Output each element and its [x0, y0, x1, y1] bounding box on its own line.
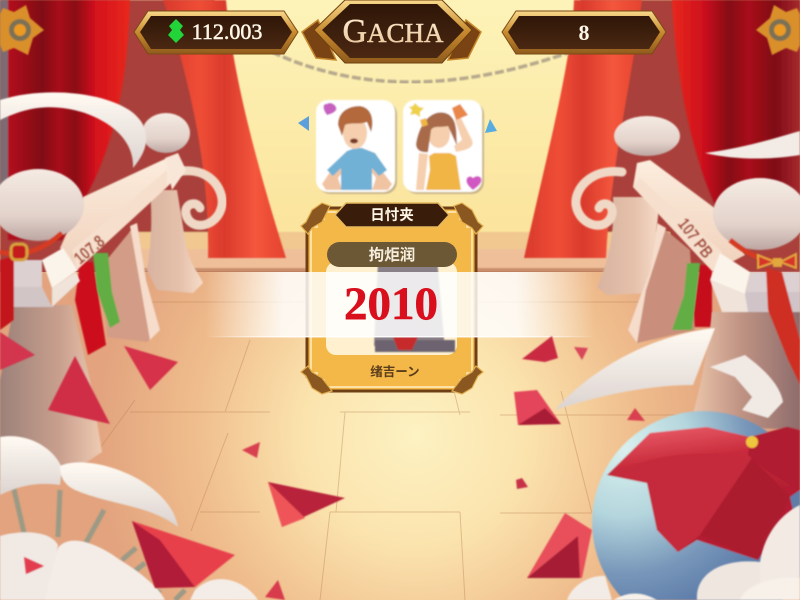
icon: heart [466, 176, 481, 190]
icon: heart [324, 103, 336, 115]
coin balance plaque [134, 11, 298, 54]
silhouette [374, 254, 455, 352]
right inner curtain [524, 0, 642, 258]
character card: girl [403, 100, 484, 194]
left corner ornament [0, 5, 44, 55]
year number: 2010 [344, 278, 438, 330]
floor [0, 272, 800, 600]
railing engraving: 107 PB [673, 215, 716, 262]
icon: left blue arrow [298, 116, 309, 131]
near left pillar [0, 169, 102, 480]
left handrail [60, 153, 186, 270]
floating white shard hook [710, 355, 783, 418]
right handrail [633, 160, 745, 272]
icon: green gem [168, 19, 184, 43]
counter value: 8 [578, 20, 590, 45]
coin amount: 112.003 [192, 19, 262, 44]
result banner [205, 272, 595, 338]
chain [272, 52, 570, 82]
icon: right blue arrow [485, 119, 497, 133]
card pill label [327, 242, 457, 267]
back left pillar [142, 113, 222, 293]
right corner ornament [756, 5, 800, 55]
left middle pedestal with tassel [93, 223, 160, 342]
red ribbon [0, 233, 62, 254]
red ribbon and bow [730, 240, 776, 262]
title plaque [302, 0, 481, 63]
white mushroom objects lower left [0, 436, 258, 600]
prize card [301, 203, 483, 394]
ball with red bow [592, 411, 800, 600]
card title: 日忖夹 [370, 206, 414, 224]
clouds lower right [567, 505, 800, 600]
near right pillar [690, 178, 800, 430]
counter plaque [502, 11, 666, 54]
floating white ribbon top right [705, 131, 800, 159]
card image panel [326, 262, 457, 355]
floating white ribbon top left [0, 92, 146, 168]
back wall [0, 0, 800, 290]
card pill label: 拘炬润 [369, 245, 415, 264]
card corner ornaments [301, 203, 483, 394]
floating white shard large [555, 328, 715, 410]
character card: boy [316, 100, 397, 194]
right middle pedestal with tassel [628, 223, 700, 343]
left inner curtain [163, 0, 286, 258]
title text: GACHA [342, 13, 444, 50]
right outer curtain [672, 0, 800, 327]
left outer curtain [0, 0, 130, 355]
card footer: 绪吉ーン [370, 364, 420, 379]
red paper shards [0, 332, 645, 600]
back right pillar [576, 116, 680, 295]
railing engraving: 107.8 [71, 232, 109, 268]
card title plaque [335, 203, 449, 227]
icon: star [409, 103, 424, 117]
